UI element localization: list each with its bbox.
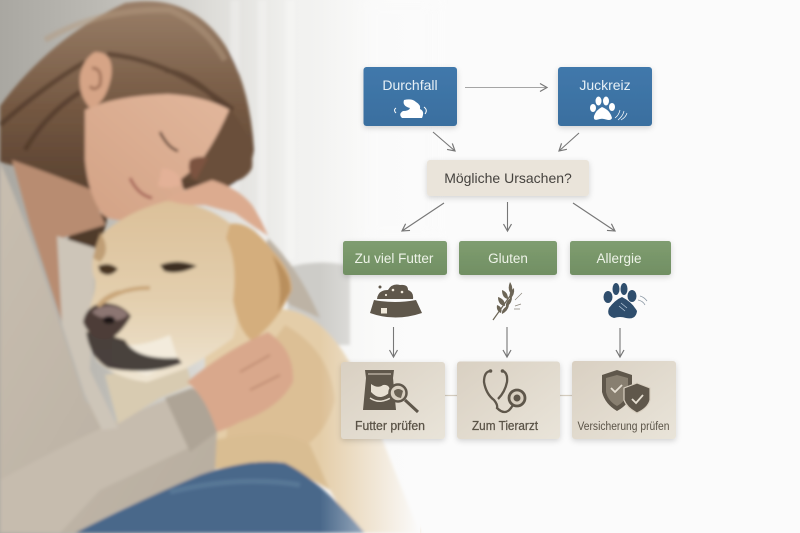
dog head xyxy=(86,201,240,382)
sweater xyxy=(0,162,217,533)
icon: paw scratching xyxy=(590,96,627,120)
ear xyxy=(80,52,112,108)
eye, nose and mouth xyxy=(160,132,178,151)
neck xyxy=(12,160,105,322)
panel: Zum Tierarzt: Zum Tierarzt xyxy=(472,419,538,433)
icon: stool xyxy=(394,99,426,118)
dog eyes xyxy=(98,264,118,275)
panel: Versicherung prüfen: Versicherung prüfen xyxy=(578,421,670,433)
dog ear xyxy=(226,224,292,341)
panel: Juckreiz: Juckreiz xyxy=(579,77,631,93)
dog mouth and nose xyxy=(86,332,182,371)
dog chest xyxy=(105,360,192,424)
arrow: causes to Zu viel Futter xyxy=(402,203,444,231)
face xyxy=(85,94,230,220)
panel: Durchfall xyxy=(364,67,457,126)
hand on head xyxy=(168,180,268,236)
panel: Futter prüfen xyxy=(341,362,445,439)
panel: Mögliche Ursachen xyxy=(427,160,589,196)
panel: Zu viel Futter: Zu viel Futter xyxy=(355,251,434,266)
inner cardigan panel xyxy=(57,236,118,430)
panel: Zum Tierarzt xyxy=(457,362,560,439)
panel: Gluten xyxy=(459,241,557,275)
panel: Zu viel Futter xyxy=(343,241,447,275)
panel: Allergie: Allergie xyxy=(596,251,642,266)
arrow: Durchfall to causes xyxy=(433,132,455,151)
panel: Gluten: Gluten xyxy=(488,251,528,266)
arrow: Juckreiz to causes xyxy=(559,133,579,151)
arrow: causes to Gluten xyxy=(506,202,508,231)
arrow: Gluten to Zum Tierarzt xyxy=(506,327,508,357)
hand on neck xyxy=(187,332,293,432)
icon: shields xyxy=(602,370,650,413)
panel: Durchfall: Durchfall xyxy=(382,77,438,93)
arrow: Durchfall to Juckreiz xyxy=(465,86,547,88)
icon: food bag with magnifier xyxy=(363,370,418,412)
arrow: Zu viel Futter to Futter prüfen xyxy=(392,327,394,357)
icon: food bowl xyxy=(370,285,422,318)
icon: stethoscope xyxy=(484,369,525,412)
jeans xyxy=(75,462,365,533)
sleeve behind dog xyxy=(262,238,320,318)
photo: woman hugging a golden retriever xyxy=(0,0,435,533)
panel: Versicherung prüfen xyxy=(572,361,676,439)
hair xyxy=(0,1,254,215)
panel: Futter prüfen: Futter prüfen xyxy=(355,419,425,433)
dog body xyxy=(205,300,420,533)
right hair strands over face xyxy=(188,108,252,188)
arrow: causes to Allergie xyxy=(573,203,615,231)
arrow: Allergie to Versicherung prüfen xyxy=(619,328,621,357)
panel: Allergie xyxy=(570,241,671,275)
panel: Juckreiz xyxy=(558,67,652,126)
icon: wheat xyxy=(493,282,522,320)
icon: allergy paw xyxy=(604,283,647,318)
panel: Mögliche Ursachen: Mögliche Ursachen? xyxy=(444,170,572,186)
